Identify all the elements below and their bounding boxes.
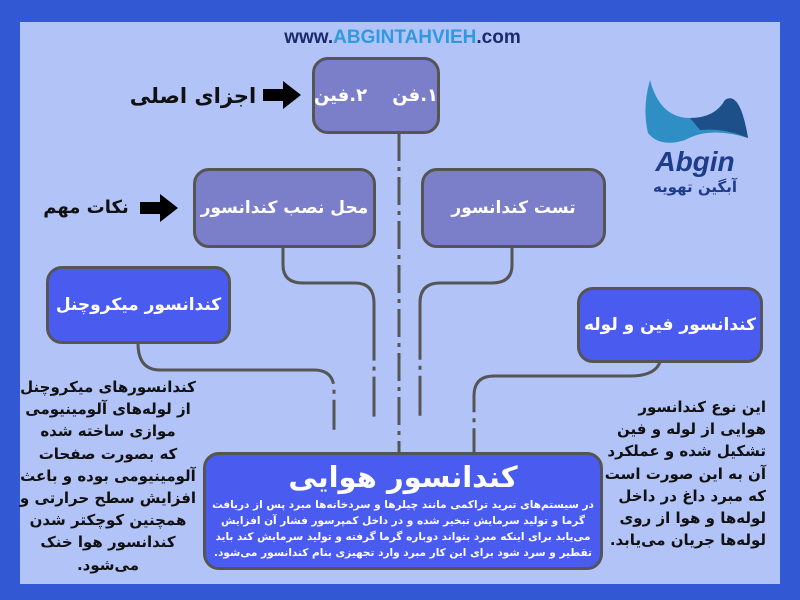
text: fin and tube description: که مبرد داغ در داخل [618,487,766,505]
text: fin and tube description: لوله‌ها جریان می‌یابد. [610,531,766,549]
text: microchannel description: از لوله‌های آلومینیومی [25,400,191,418]
text: microchannel description: کندانسورهای میکروچنل [20,378,196,396]
arrow: main parts [263,81,301,109]
text: microchannel description: آلومینیومی بوده و باعث [20,467,196,485]
description: می‌یابد برای اینکه مبرد بتواند دوباره گرما گرفته و تولید سرمایش کند باید [215,531,591,543]
logo: آبگین تهویه [653,178,737,196]
text: microchannel description: کندانسور هوا خنک [40,533,176,551]
box: fin and tube condenser: کندانسور فین و لوله [584,315,756,335]
arrow: important points [140,194,178,222]
logo [645,80,748,196]
box: microchannel condenser: کندانسور میکروچنل [56,295,221,315]
text: microchannel description: می‌شود. [77,556,139,574]
text: fin and tube description: هوایی از لوله و فین [617,420,766,438]
text: microchannel description [19,378,196,574]
text: microchannel description: همچنین کوچکتر شدن [30,511,186,529]
box: microchannel condenser [46,266,231,344]
box: fin and tube condenser [577,287,763,363]
text: microchannel description: موازی ساخته شده [40,422,176,440]
box: fin types: ۱.فن ۲.فین [314,85,438,106]
box: fin types [312,57,440,134]
box: condenser test [421,168,606,248]
logo text: Abgin [655,146,735,177]
description: تقطیر و سرد شود برای این کار مبرد وارد تجهیزی بنام کندانسور می‌شود. [214,547,592,559]
label: important points: نکات مهم [43,197,129,218]
panel: air cooled condenser [203,452,603,570]
text: microchannel description: افزایش سطح حرارتی و [20,489,196,507]
icon: logo wave [645,80,748,143]
text: fin and tube description: تشکیل شده و عملکرد [607,442,766,460]
text: microchannel description: که بصورت صفحات [39,445,177,463]
website url: www.ABGINTAHVIEH.com [284,27,521,48]
label: main parts: اجزای اصلی [130,84,256,108]
text: fin and tube description: لوله‌ها و هوا از روی [620,509,766,527]
heading: air condenser: کندانسور هوایی [288,460,518,494]
text: fin and tube description: آن به این صورت است [605,465,766,483]
description: گرما و تولید سرمایش تبخیر شده و در داخل کمپرسور فشار آن افزایش [221,515,585,527]
text: fin and tube description: این نوع کندانسور [638,398,766,416]
box: condenser test: تست کندانسور [451,198,576,218]
description: در سیستم‌های تبرید تراکمی مانند چیلرها و سردخانه‌ها مبرد پس از دریافت [212,499,594,511]
text: fin and tube description [605,398,766,549]
box: installation location [193,168,376,248]
description [212,499,594,559]
box: installation location: محل نصب کندانسور [201,198,368,218]
